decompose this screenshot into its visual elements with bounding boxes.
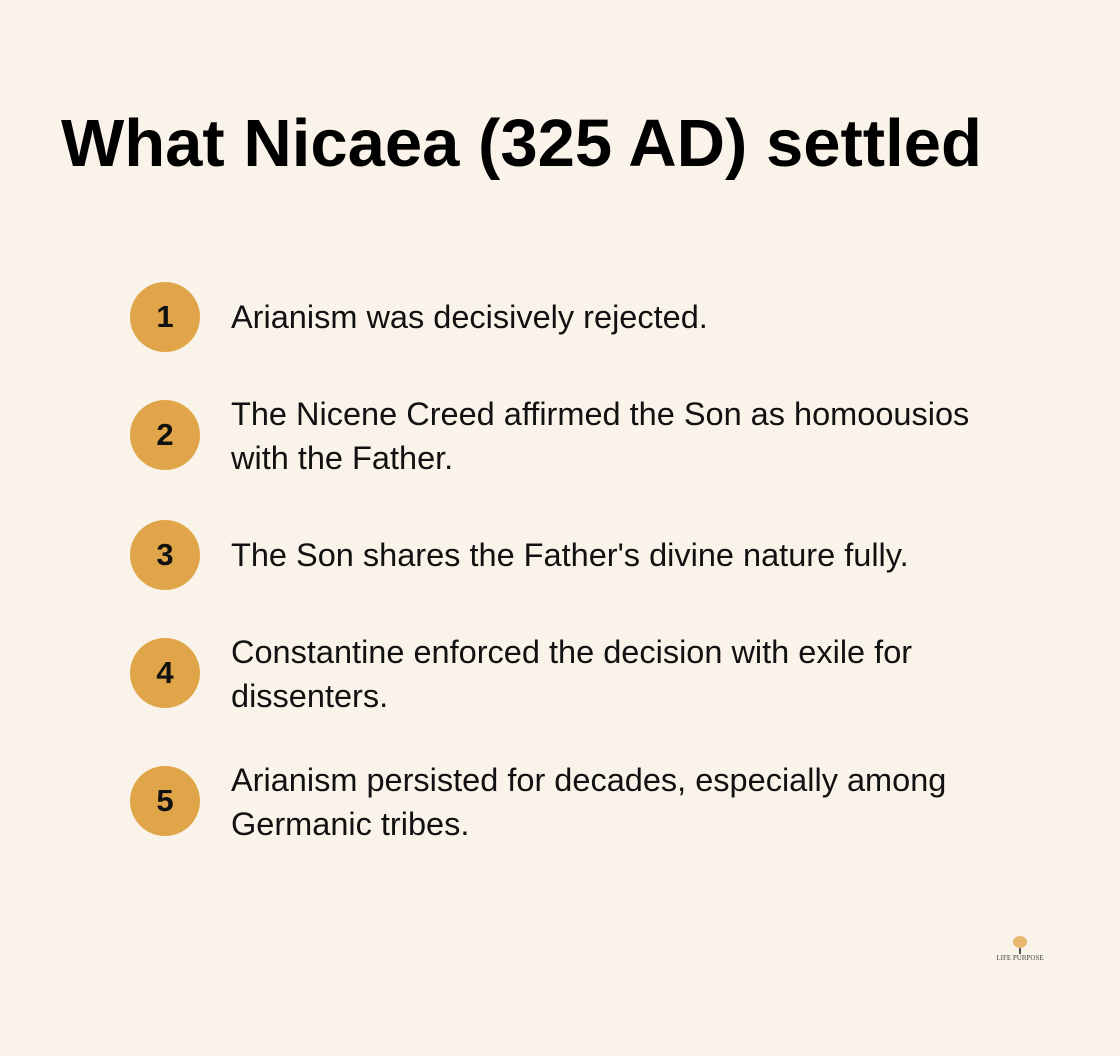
text 5: Arianism persisted for decades, especially among Germanic tribes.: [231, 762, 946, 842]
badge 2: 2: [156, 417, 174, 452]
badge 1: [130, 282, 200, 352]
item 5: [130, 762, 946, 842]
item 1: [130, 282, 708, 352]
logo: LIFE PURPOSE: [996, 954, 1044, 962]
text 4: Constantine enforced the decision with exile for dissenters.: [231, 634, 912, 714]
badge 3: 3: [156, 537, 174, 572]
item 3: [130, 520, 909, 590]
badge 3: [130, 520, 200, 590]
item 2: [130, 396, 969, 476]
badge 4: [130, 638, 200, 708]
item 4: [130, 634, 912, 714]
badge 1: 1: [156, 299, 174, 334]
title: What Nicaea (325 AD) settled: [61, 106, 982, 181]
logo: [996, 936, 1044, 962]
text 1: Arianism was decisively rejected.: [231, 299, 708, 335]
badge 5: 5: [156, 783, 174, 818]
badge 2: [130, 400, 200, 470]
badge 5: [130, 766, 200, 836]
text 3: The Son shares the Father's divine nature fully.: [231, 537, 909, 573]
badge 4: 4: [156, 655, 174, 690]
text 2: The Nicene Creed affirmed the Son as homoousios with the Father.: [231, 396, 969, 476]
